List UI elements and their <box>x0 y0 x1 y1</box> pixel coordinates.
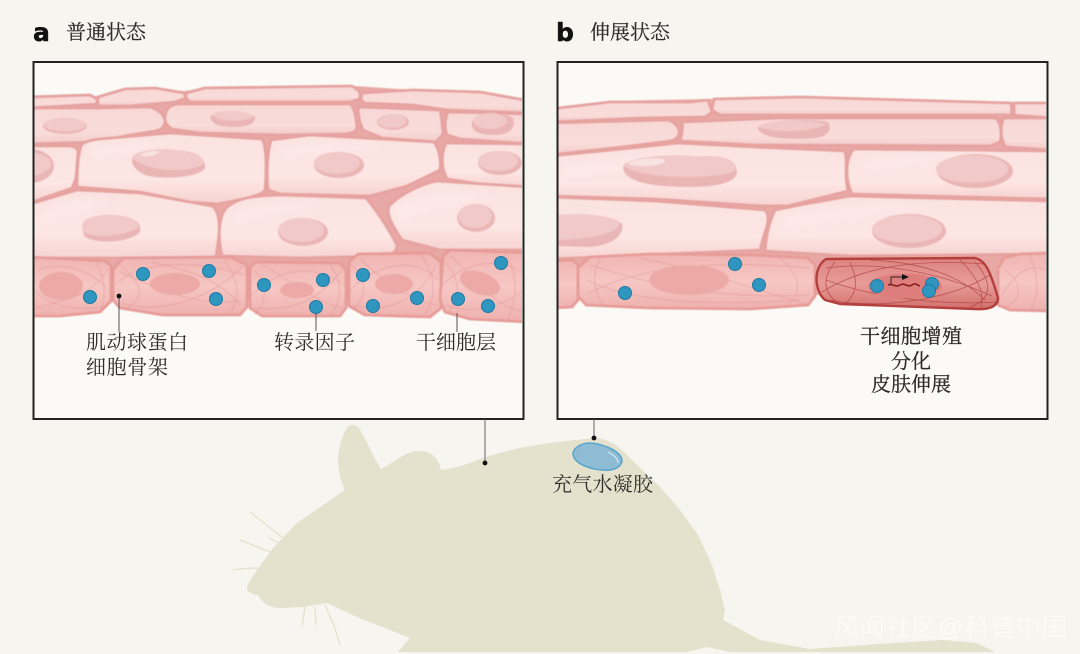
connector to mouse back <box>483 419 487 465</box>
stretched upper cells <box>550 97 1050 259</box>
labels a: 肌动球蛋白 <box>86 331 188 354</box>
panel b: stretched skin <box>550 97 1050 311</box>
third row cells <box>30 133 530 204</box>
connector to hydrogel <box>592 419 596 440</box>
labels b: 分化 <box>891 350 931 373</box>
labels a: 干细胞层 <box>416 331 496 354</box>
upper nuclei b <box>550 120 1013 248</box>
stretched basal cells <box>550 253 1050 311</box>
fourth row cells <box>30 181 530 258</box>
transcription factors a <box>84 256 508 314</box>
panel b frame <box>558 63 1047 419</box>
labels a: 转录因子 <box>274 331 355 354</box>
panel a border <box>34 62 524 419</box>
mouse silhouette <box>233 425 1000 652</box>
cell highlights <box>40 142 490 226</box>
second row cells <box>30 104 530 144</box>
transcription factors b <box>618 258 766 300</box>
basal nucleus b <box>649 265 729 295</box>
hydrogel label: 充气水凝胶 <box>552 473 654 496</box>
heading a <box>33 18 147 47</box>
watermark: 风闻社区@科普中国 <box>834 614 1067 642</box>
heading b <box>556 18 671 47</box>
cell highlights b <box>956 150 970 151</box>
labels b: 皮肤伸展 <box>871 373 951 396</box>
heading b: b <box>556 18 574 47</box>
activated stem cell <box>816 258 998 309</box>
labels b <box>860 325 962 396</box>
panel b border <box>558 62 1048 419</box>
stem cell layer <box>30 250 530 322</box>
panel a frame <box>34 63 523 419</box>
actin b <box>585 256 1048 310</box>
pointer lines a <box>117 294 457 332</box>
superficial cells <box>30 86 530 113</box>
icon: hydrogel <box>573 443 622 470</box>
stem nuclei <box>38 270 500 300</box>
labels a <box>86 331 496 379</box>
panel a: skin cell layers <box>6 86 530 322</box>
heading a: 普通状态 <box>66 21 147 44</box>
labels a: 细胞骨架 <box>86 356 168 379</box>
heading b: 伸展状态 <box>590 21 671 44</box>
labels b: 干细胞增殖 <box>860 325 962 348</box>
nuclei <box>6 111 522 246</box>
actin cytoskeleton <box>36 254 525 318</box>
heading a: a <box>33 18 50 47</box>
